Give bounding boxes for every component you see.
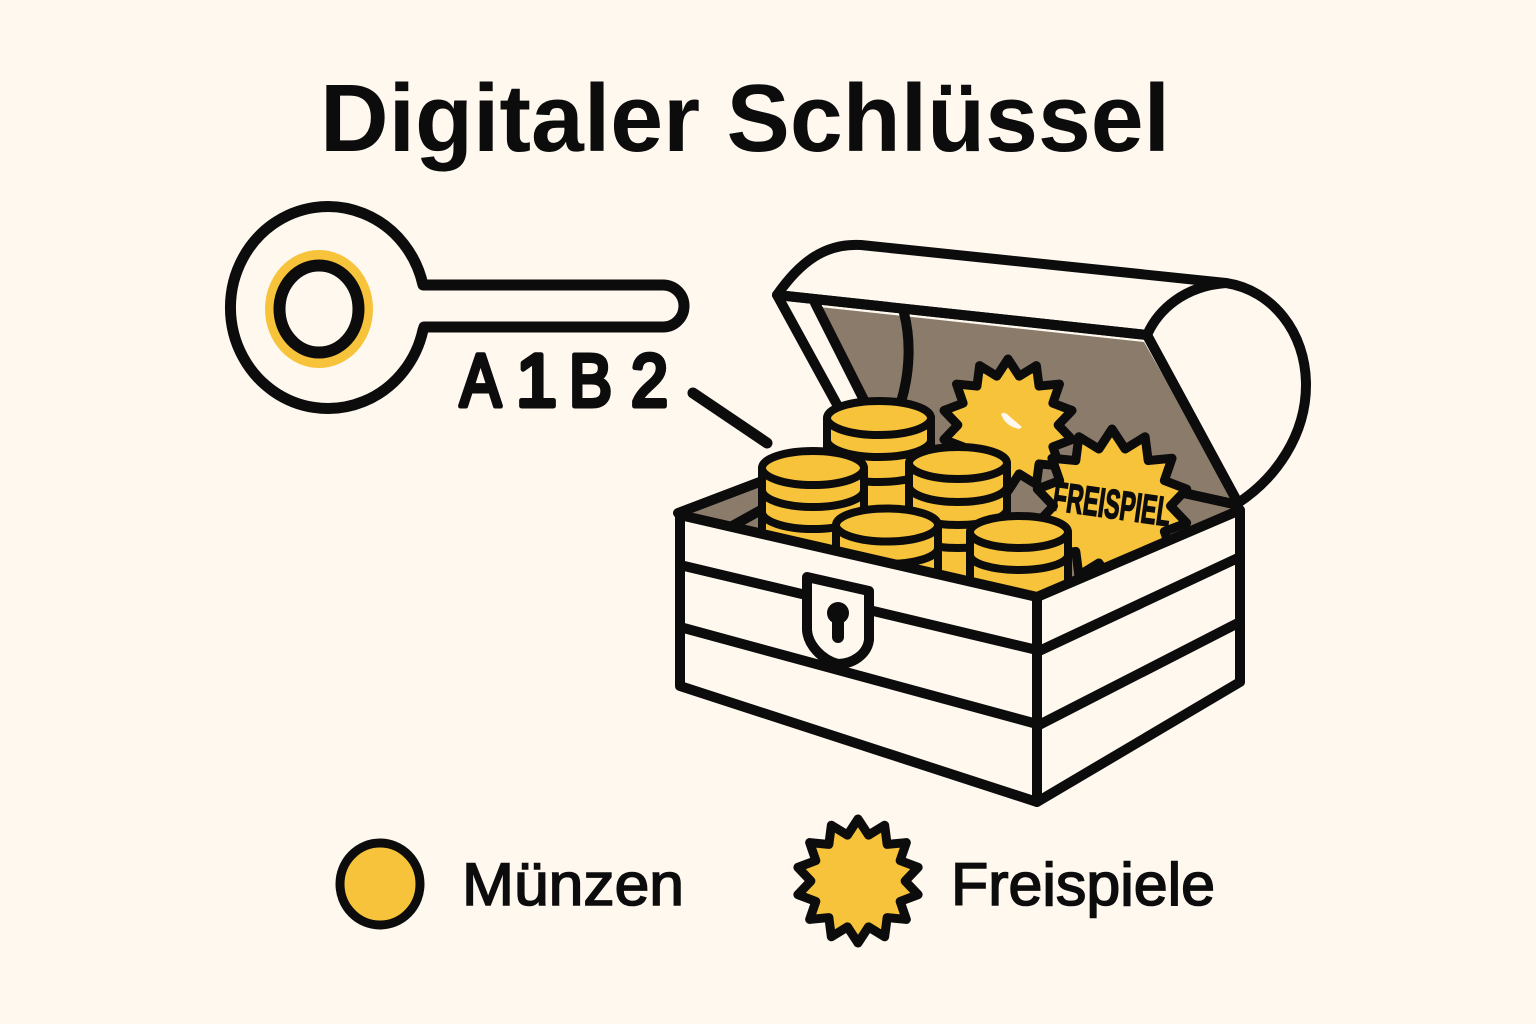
label: Münzen: Münzen (462, 851, 684, 918)
title: Digitaler Schlüssel (320, 65, 1170, 172)
coin stack back (827, 401, 931, 520)
key code label: 1 (516, 339, 557, 422)
key code label: 2 (631, 339, 668, 422)
chest interior rim (678, 478, 1238, 600)
arrow: key code to chest (693, 393, 767, 443)
chest lock (807, 577, 869, 664)
voucher star back (944, 359, 1072, 491)
key code label (460, 339, 668, 422)
chest front panel (680, 510, 1240, 802)
coin stack left (762, 451, 864, 570)
coin stack right back (909, 447, 1007, 600)
legend: coins (340, 843, 684, 925)
coin stack front right (970, 516, 1068, 620)
chest lid (777, 245, 1306, 570)
icon: coin (340, 843, 420, 925)
icon: digital key (230, 206, 684, 408)
key code label: B (569, 339, 612, 422)
star highlight (1001, 413, 1022, 429)
voucher star front (1037, 429, 1187, 583)
treasure chest (678, 245, 1306, 802)
coin stack front middle (836, 508, 938, 610)
label: Freispiele: Freispiele (951, 851, 1215, 918)
icon: star badge (798, 819, 918, 943)
freispiel label: FREISPIEL (1050, 474, 1174, 536)
key code label: A (460, 339, 502, 422)
legend: free spins (798, 819, 1215, 943)
